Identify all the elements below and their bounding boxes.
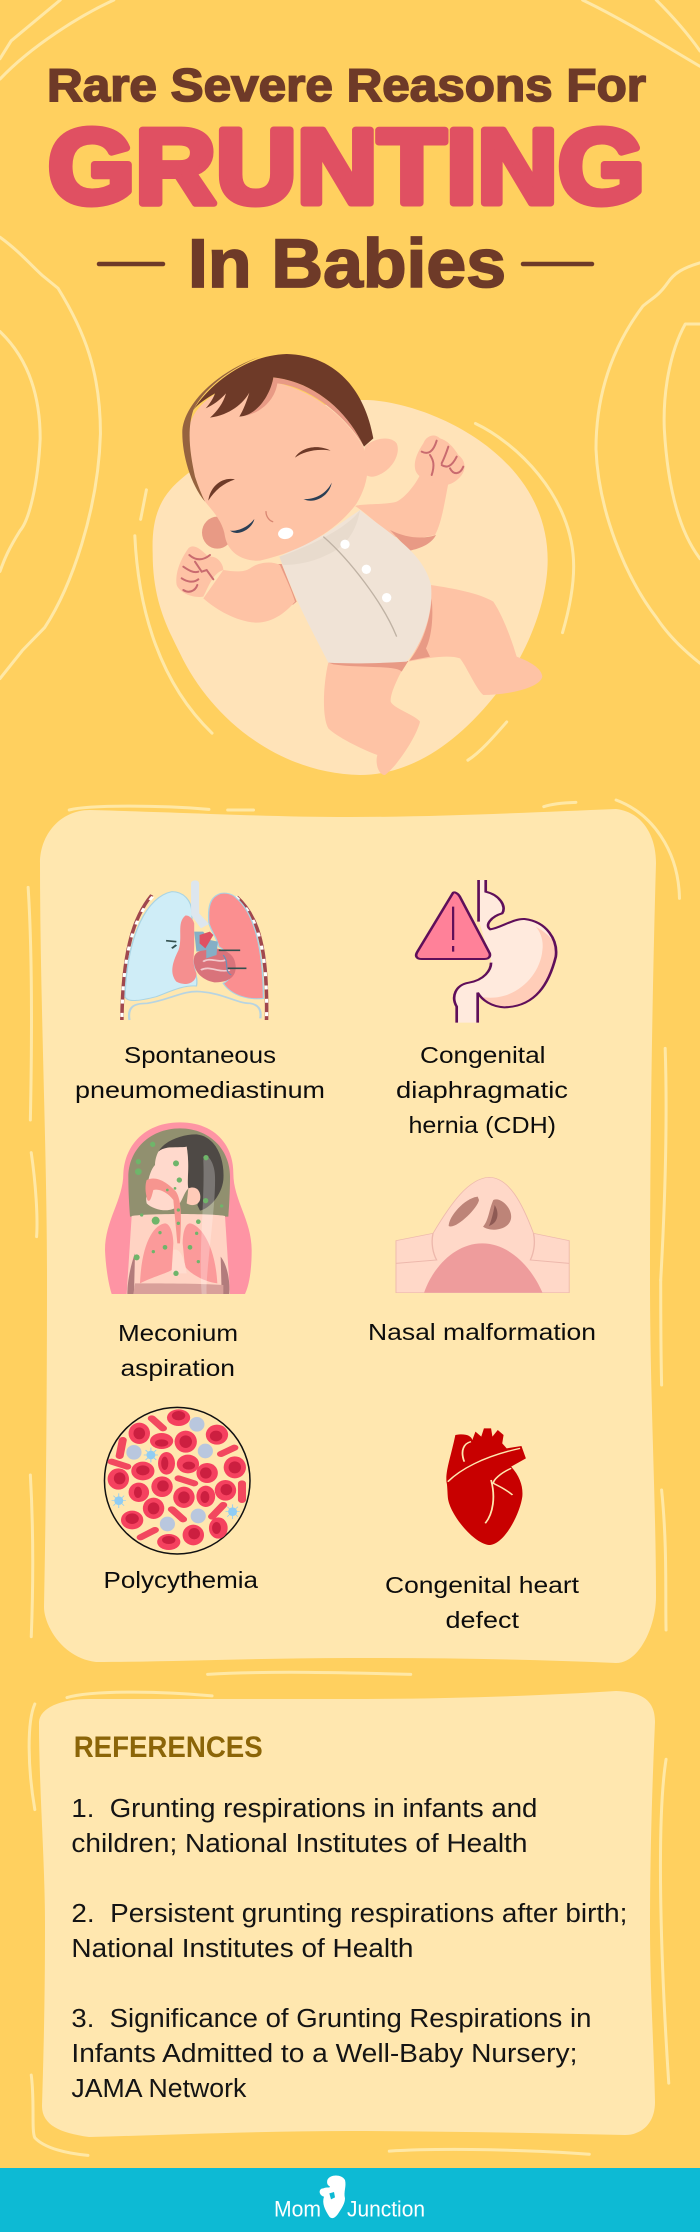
right leg	[408, 585, 542, 695]
nose	[266, 512, 273, 522]
icon: nose from below	[396, 1177, 569, 1293]
footer band	[0, 2168, 700, 2232]
logo icon: mother and child	[320, 2176, 345, 2218]
label: aspiration	[120, 1355, 235, 1381]
onesie seam	[323, 537, 397, 637]
label: hernia (CDH)	[408, 1112, 556, 1138]
icon: lungs with pneumomediastinum	[122, 880, 267, 1020]
label: defect	[446, 1607, 520, 1633]
label: Meconium	[118, 1320, 238, 1346]
icon: baby in womb with meconium	[105, 1122, 252, 1294]
label: pneumomediastinum	[75, 1077, 325, 1103]
left ear	[202, 517, 233, 549]
title line 1: Rare Severe Reasons For	[47, 59, 646, 111]
reference list: 3. Significance of Grunting Respirations in	[71, 2005, 591, 2033]
title	[47, 59, 646, 302]
reference list: 1. Grunting respirations in infants and	[71, 1795, 537, 1823]
right fist	[415, 436, 465, 485]
title dash right	[523, 262, 592, 266]
panel: rare causes	[28, 800, 679, 1674]
reference list: JAMA Network	[71, 2075, 247, 2103]
right arm	[355, 475, 448, 538]
footer logo: Mom	[274, 2196, 321, 2222]
panel background	[40, 809, 656, 1663]
label: Nasal malformation	[368, 1319, 596, 1345]
reference list: children; National Institutes of Health	[71, 1830, 527, 1858]
label: diaphragmatic	[396, 1077, 568, 1103]
panel: references	[29, 1691, 669, 2155]
panel sketch lines	[28, 800, 679, 1674]
label	[396, 1042, 568, 1138]
icon: stomach hernia with warning sign	[416, 880, 556, 1023]
title line 3: In Babies	[188, 225, 506, 302]
motion lines	[135, 423, 574, 760]
reference list: Infants Admitted to a Well-Baby Nursery;	[71, 2040, 577, 2068]
icon: blood cells in circle (polycythemia)	[104, 1407, 250, 1554]
left arm	[278, 564, 297, 605]
face	[188, 381, 368, 561]
right ear	[363, 439, 398, 477]
label	[118, 1320, 238, 1381]
reference list: 2. Persistent grunting respirations after birth;	[71, 1900, 627, 1928]
eyebrows	[208, 447, 331, 501]
milk drop	[277, 526, 294, 540]
decorative sketch lines: header	[0, 0, 700, 679]
cushion	[153, 400, 548, 775]
onesie buttons	[340, 540, 391, 602]
label: Congenital	[420, 1042, 546, 1068]
closed eyes	[230, 483, 332, 533]
footer logo	[274, 2176, 425, 2222]
footer logo: Junction	[347, 2196, 425, 2222]
onesie	[279, 510, 431, 663]
baby figure	[176, 354, 542, 775]
references background	[39, 1691, 655, 2137]
left leg	[324, 662, 420, 775]
label	[75, 1042, 325, 1103]
reference list	[71, 1795, 627, 2103]
title dash left	[99, 262, 163, 266]
label: Spontaneous	[124, 1042, 276, 1068]
label: Polycythemia	[104, 1567, 259, 1593]
references sketch lines	[29, 1692, 669, 2155]
reference list: National Institutes of Health	[71, 1935, 413, 1963]
left fist	[176, 546, 223, 597]
label	[385, 1572, 580, 1633]
hair	[182, 354, 373, 502]
icon: anatomical heart	[446, 1428, 526, 1545]
label: Congenital heart	[385, 1572, 580, 1598]
illustration: sleeping baby on cushion	[135, 354, 574, 775]
references heading: REFERENCES	[74, 1731, 263, 1764]
title line 2: GRUNTING	[48, 108, 645, 226]
